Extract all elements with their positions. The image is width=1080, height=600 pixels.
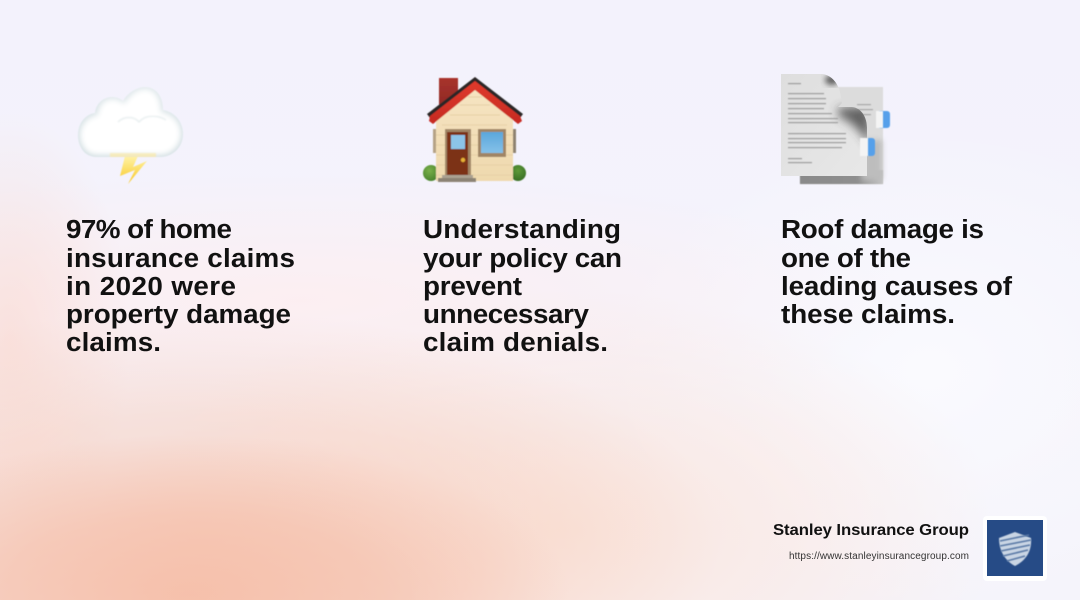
text block: property damage claims: property damage bbox=[66, 300, 291, 329]
text block: property damage claims bbox=[66, 215, 295, 357]
text block: understanding your policy: prevent bbox=[423, 272, 522, 301]
text block: property damage claims: claims. bbox=[66, 328, 161, 357]
text block: property damage claims: 97% of home bbox=[66, 215, 232, 244]
brand name: Stanley Insurance Group bbox=[773, 522, 969, 539]
walls bbox=[436, 88, 513, 181]
logo: shield badge bbox=[983, 516, 1047, 581]
text block: roof damage: Roof damage is bbox=[781, 215, 984, 244]
chimney bbox=[439, 78, 458, 106]
lower tab bbox=[866, 138, 875, 156]
icon: storm cloud with lightning bbox=[76, 85, 186, 184]
website url: https://www.stanleyinsurancegroup.com bbox=[789, 551, 969, 562]
text block: roof damage: leading causes of bbox=[781, 272, 1013, 301]
text block: understanding your policy bbox=[423, 215, 622, 357]
icon: documents bbox=[781, 74, 890, 184]
text block: property damage claims: insurance claims bbox=[66, 244, 295, 273]
bushes bbox=[423, 165, 439, 181]
text block: property damage claims: in 2020 were bbox=[66, 272, 236, 301]
upper tab bbox=[878, 111, 890, 128]
icon: house bbox=[423, 77, 526, 182]
window bbox=[478, 129, 506, 157]
door bbox=[445, 129, 471, 176]
text block: understanding your policy: Understanding bbox=[423, 215, 621, 244]
front page bbox=[781, 74, 871, 178]
text block: roof damage: these claims. bbox=[781, 300, 955, 329]
back page bbox=[800, 87, 883, 184]
text block: understanding your policy: your policy can bbox=[423, 244, 622, 273]
cloud body bbox=[76, 85, 186, 159]
steps bbox=[442, 175, 473, 178]
text block: roof damage bbox=[781, 215, 1013, 329]
roof bbox=[427, 77, 523, 118]
lightning bolt bbox=[120, 156, 147, 184]
text block: understanding your policy: claim denials. bbox=[423, 328, 608, 357]
text block: roof damage: one of the bbox=[781, 244, 911, 273]
text block: understanding your policy: unnecessary bbox=[423, 300, 589, 329]
shutters bbox=[433, 129, 437, 153]
